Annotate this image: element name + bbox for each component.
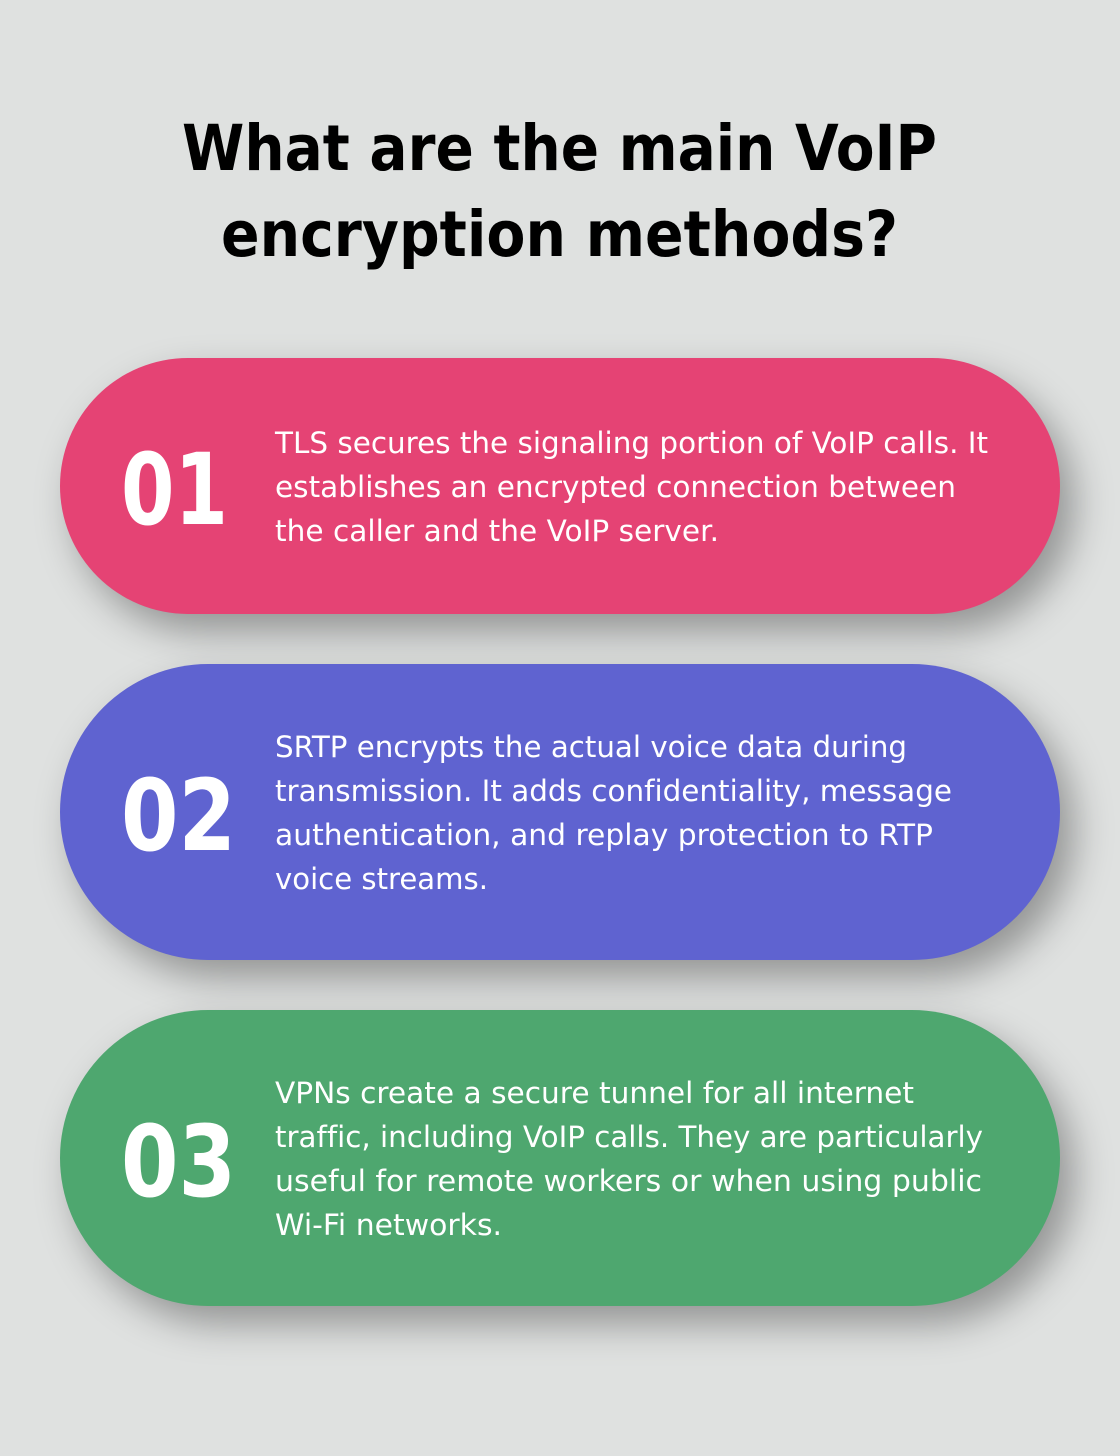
text block: VPN description [275,1076,983,1242]
title: What are the main VoIP [182,112,937,185]
text block: VPN description: useful for remote workers or when using public [275,1164,982,1198]
panel: step 02 SRTP [60,664,1060,960]
text block: TLS description: the caller and the VoIP server. [275,514,719,548]
text block: SRTP description: SRTP encrypts the actual voice data during [275,730,907,764]
text block: SRTP description [275,730,952,896]
number 02: 02 [121,759,236,874]
panel: step 01 TLS [60,358,1060,614]
text block: SRTP description: authentication, and replay protection to RTP [275,818,933,852]
text block: SRTP description: transmission. It adds confidentiality, message [275,774,952,808]
text block: TLS description [274,426,988,548]
number 03: 03 [121,1105,236,1220]
title [182,112,937,271]
number 01: 01 [121,433,228,548]
text block: VPN description: VPNs create a secure tunnel for all internet [275,1076,914,1110]
text block: TLS description: TLS secures the signaling portion of VoIP calls. It [274,426,988,460]
text block: SRTP description: voice streams. [275,862,488,896]
text block: VPN description: traffic, including VoIP calls. They are particularly [275,1120,983,1154]
title: encryption methods? [221,198,898,271]
text block: VPN description: Wi-Fi networks. [275,1208,502,1242]
panel: step 03 VPN [60,1010,1060,1306]
text block: TLS description: establishes an encrypted connection between [275,470,956,504]
